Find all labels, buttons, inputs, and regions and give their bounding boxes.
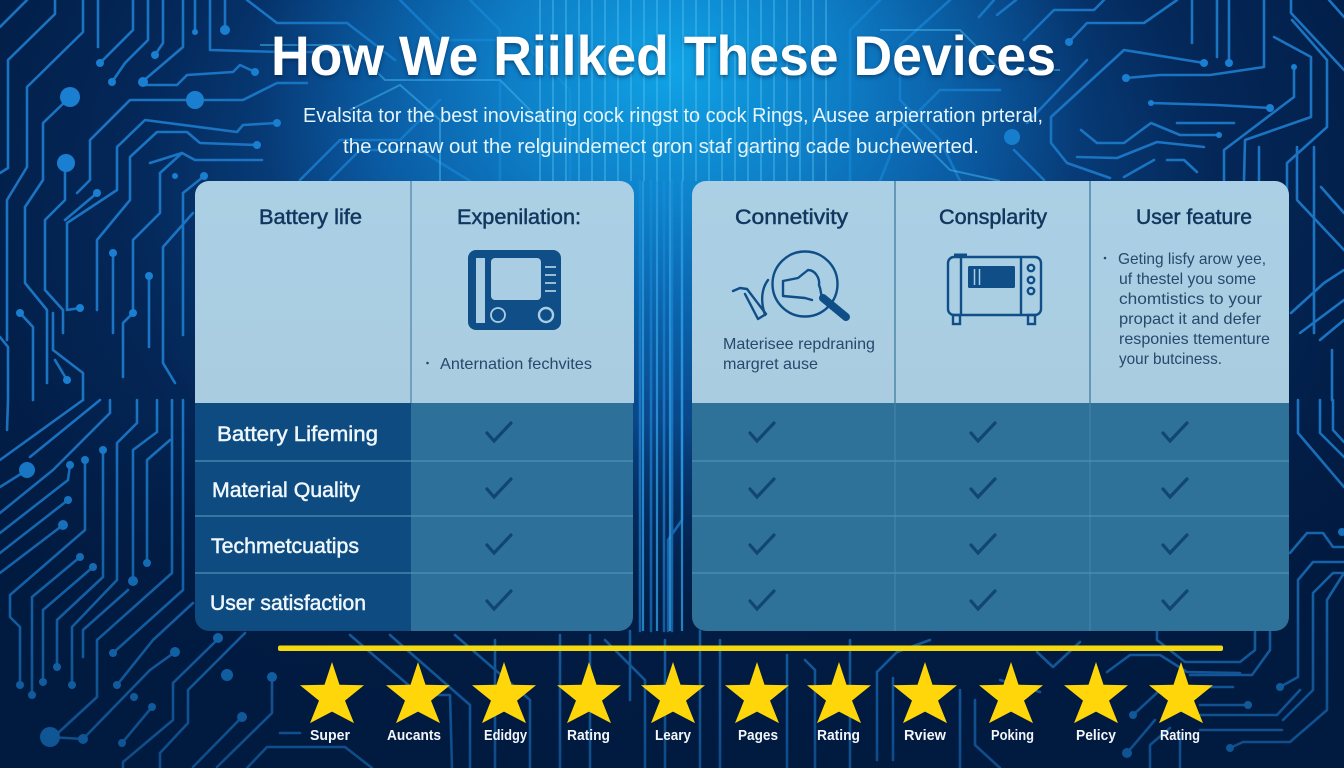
star: Rating: Rating: [817, 728, 860, 744]
right panel header background: [692, 181, 1289, 403]
star: Pages: [725, 662, 789, 744]
panel: right comparison table: [692, 181, 1289, 631]
star: Super: [300, 662, 364, 744]
heading: Expenilation: Expenilation:: [457, 206, 581, 229]
icon: microwave appliance: [948, 255, 1041, 324]
text: User feature paragraph: propact it and defer: [1119, 311, 1262, 328]
title: How We Riilked These Devices: [271, 24, 1056, 87]
row label: Material Quality: Material Quality: [212, 478, 360, 502]
right panel check rows: [692, 403, 1289, 631]
star rating row: [300, 662, 1213, 744]
icon: control device: [468, 250, 561, 330]
text: Materisee repdraning: Materisee repdraning: [723, 336, 875, 353]
text: Materisee repdraning: margret ause: [723, 356, 818, 373]
star: Rating: [1149, 662, 1213, 744]
row label: User satisfaction: User satisfaction: [210, 591, 366, 615]
row label: Techmetcuatips: Techmetcuatips: [211, 534, 359, 558]
text: User feature paragraph: chomtistics to your: [1119, 291, 1263, 308]
text: Materisee repdraning: [723, 336, 875, 373]
star: Leary: Leary: [655, 728, 691, 744]
star: Edidgy: [472, 662, 536, 744]
star: Rview: [893, 662, 957, 744]
panel: left comparison table: [195, 181, 634, 631]
check marks columns 2 to 4: [750, 423, 1187, 609]
star: Leary: [641, 662, 705, 744]
text: User feature paragraph: Geting lisfy arow yee,: [1118, 251, 1266, 268]
heading: Battery life: Battery life: [259, 206, 362, 229]
star: Rview: Rview: [904, 728, 947, 744]
heading: Connetivity: Connetivity: [735, 206, 849, 229]
star: Poking: [979, 662, 1043, 744]
star: Super: Super: [310, 728, 350, 744]
subtitle: [303, 105, 1043, 158]
star: Edidgy: Edidgy: [484, 728, 527, 744]
yellow divider line: [278, 646, 1223, 651]
heading: User feature: User feature: [1136, 206, 1252, 229]
star: Rating: Rating: [567, 728, 610, 744]
left panel check column: [411, 403, 633, 631]
star: Pages: Pages: [738, 728, 778, 744]
row label: Battery Lifeming: Battery Lifeming: [217, 422, 378, 446]
text: User feature paragraph: responies ttementure: [1119, 331, 1270, 348]
text: Anternation fechvites: Anternation fechvites: [440, 356, 592, 373]
star: Rating: [807, 662, 871, 744]
star: Rating: Rating: [1160, 728, 1200, 744]
left panel header background: [195, 181, 634, 403]
star: Aucants: Aucants: [387, 728, 441, 744]
star: Pelicy: [1064, 662, 1128, 744]
text: User feature paragraph: [1104, 251, 1270, 368]
icon: magnifier and tool: [733, 252, 846, 319]
subtitle: the cornaw out the relguindemect gron staf garting cade buchewerted.: [343, 136, 979, 158]
star: Poking: Poking: [991, 728, 1034, 744]
check marks column 1: [487, 423, 511, 609]
subtitle: Evalsita tor the best inovisating cock ringst to cock Rings, Ausee arpierration prteral,: [303, 105, 1043, 127]
left panel label column: [195, 403, 411, 631]
star: Rating: [557, 662, 621, 744]
text: User feature paragraph: your butciness.: [1119, 351, 1222, 368]
heading: Consplarity: Consplarity: [939, 206, 1048, 229]
star: Pelicy: Pelicy: [1076, 728, 1116, 744]
text: User feature paragraph: uf thestel you some: [1119, 271, 1256, 288]
star: Aucants: [386, 662, 450, 744]
